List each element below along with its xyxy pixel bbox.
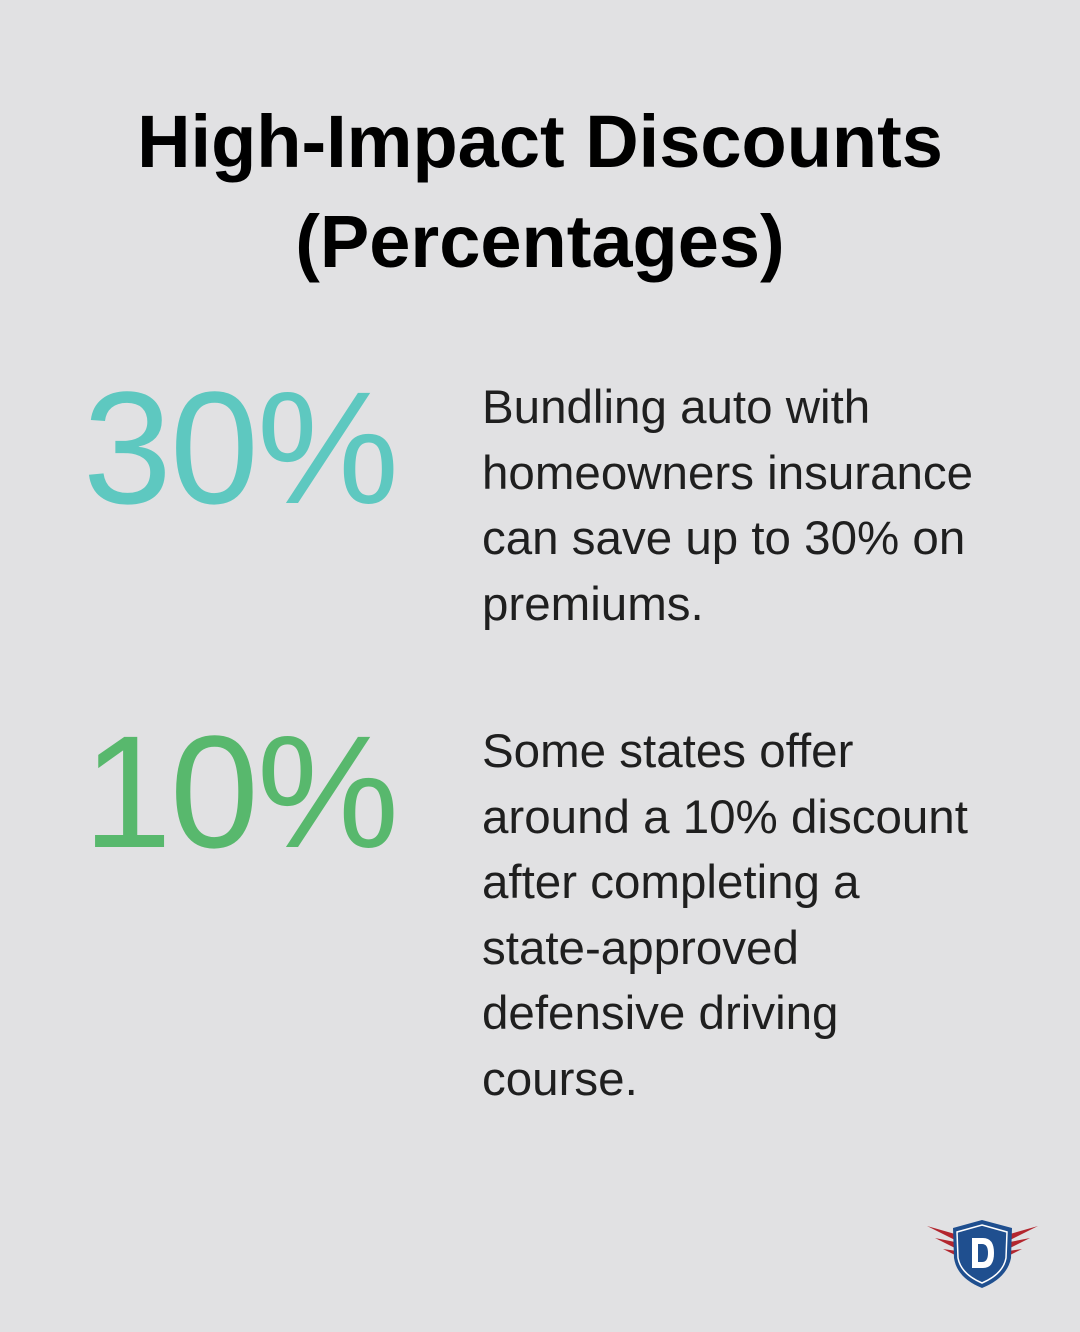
title: (Percentages) xyxy=(295,200,785,283)
title xyxy=(137,100,943,283)
text: bundling: homeowners insurance xyxy=(482,446,973,500)
text: defensive driving: around a 10% discount xyxy=(482,790,968,844)
text: bundling: Bundling auto with xyxy=(482,381,870,434)
stat: 30%: 30% xyxy=(83,358,397,537)
text: defensive driving: state-approved xyxy=(482,922,799,974)
text: defensive driving: course. xyxy=(482,1052,638,1106)
text: bundling xyxy=(482,381,973,630)
text: bundling: can save up to 30% on xyxy=(482,512,965,565)
stat: 10%: 10% xyxy=(83,702,397,881)
text: defensive driving: defensive driving xyxy=(482,987,838,1040)
text: defensive driving: Some states offer xyxy=(482,725,853,778)
icon: logo shield xyxy=(927,1220,1038,1288)
title: High-Impact Discounts xyxy=(137,100,943,183)
text: bundling: premiums. xyxy=(482,578,704,630)
text: defensive driving xyxy=(482,725,968,1106)
text: defensive driving: after completing a xyxy=(482,856,860,909)
